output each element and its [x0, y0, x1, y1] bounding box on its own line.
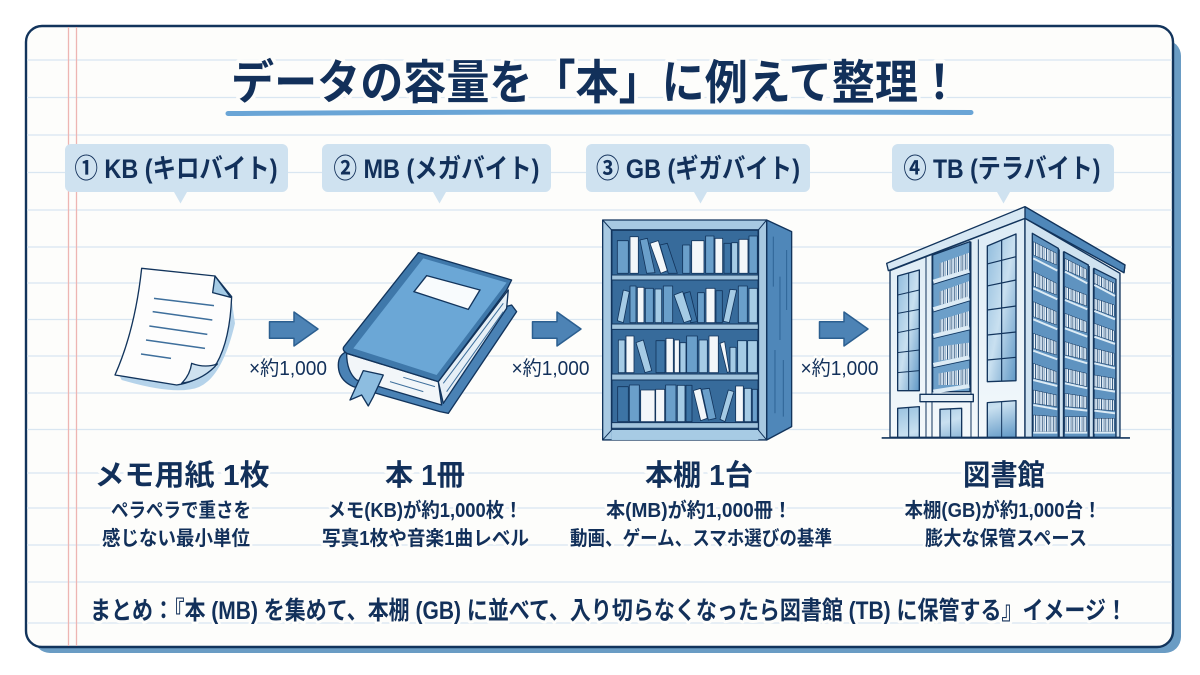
arrow: KB to MB: [270, 312, 318, 346]
badge: MB: ② MB (メガバイト): [334, 154, 540, 184]
icon: memo paper: [115, 268, 235, 390]
title underline: [228, 112, 971, 114]
description: bookshelf: 本(MB)が約1,000冊！: [606, 498, 792, 522]
title: データの容量を「本」に例えて整理！: [231, 56, 961, 109]
icon: library building: [882, 207, 1130, 438]
badge: TB: [892, 144, 1114, 204]
label: times 1000 second: ×約1,000: [512, 357, 590, 380]
column text: library: [904, 459, 1102, 550]
label: times 1000 third: ×約1,000: [800, 357, 878, 380]
column text: memo: [94, 459, 270, 550]
column text: book: 写真1枚や音楽1曲レベル: [322, 527, 529, 550]
column text: book: [322, 459, 529, 550]
badge: KB: ① KB (キロバイト): [74, 154, 278, 184]
badge: TB: ④ TB (テラバイト): [904, 154, 1100, 184]
badge: KB: [65, 144, 288, 204]
badge: MB: [322, 144, 551, 204]
heading: bookshelf: 本棚 1台: [645, 459, 753, 492]
arrow: GB to TB: [820, 312, 868, 346]
badge: GB: ③ GB (ギガバイト): [596, 154, 800, 184]
canopy and entrance: [920, 394, 973, 402]
column text: library: 膨大な保管スペース: [925, 527, 1087, 550]
heading: library: 図書館: [963, 459, 1045, 492]
left windows: [898, 270, 919, 391]
heading: book: 本 1冊: [385, 459, 465, 492]
centre shelves bay: [933, 242, 970, 392]
description: memo: ペラペラで重さを: [111, 499, 251, 522]
book rows on the right face: [1033, 242, 1114, 432]
arrow: MB to GB: [532, 312, 581, 346]
ground line: [882, 435, 1130, 440]
roof: [887, 207, 1125, 273]
badge: GB: [586, 144, 810, 204]
tall window: [987, 234, 1016, 382]
column text: memo: 感じない最小単位: [102, 526, 250, 550]
column text: bookshelf: [570, 459, 832, 550]
columns: [926, 218, 1093, 437]
description: book: メモ(KB)が約1,000枚！: [328, 498, 522, 522]
description: library: 本棚(GB)が約1,000台！: [904, 498, 1102, 522]
heading: memo: メモ用紙 1枚: [94, 459, 270, 492]
label: times 1000 first: ×約1,000: [249, 357, 327, 380]
icon: bookshelf: [603, 220, 792, 440]
icon: book: [338, 253, 517, 413]
column text: bookshelf: 動画、ゲーム、スマホ選びの基準: [570, 527, 832, 550]
